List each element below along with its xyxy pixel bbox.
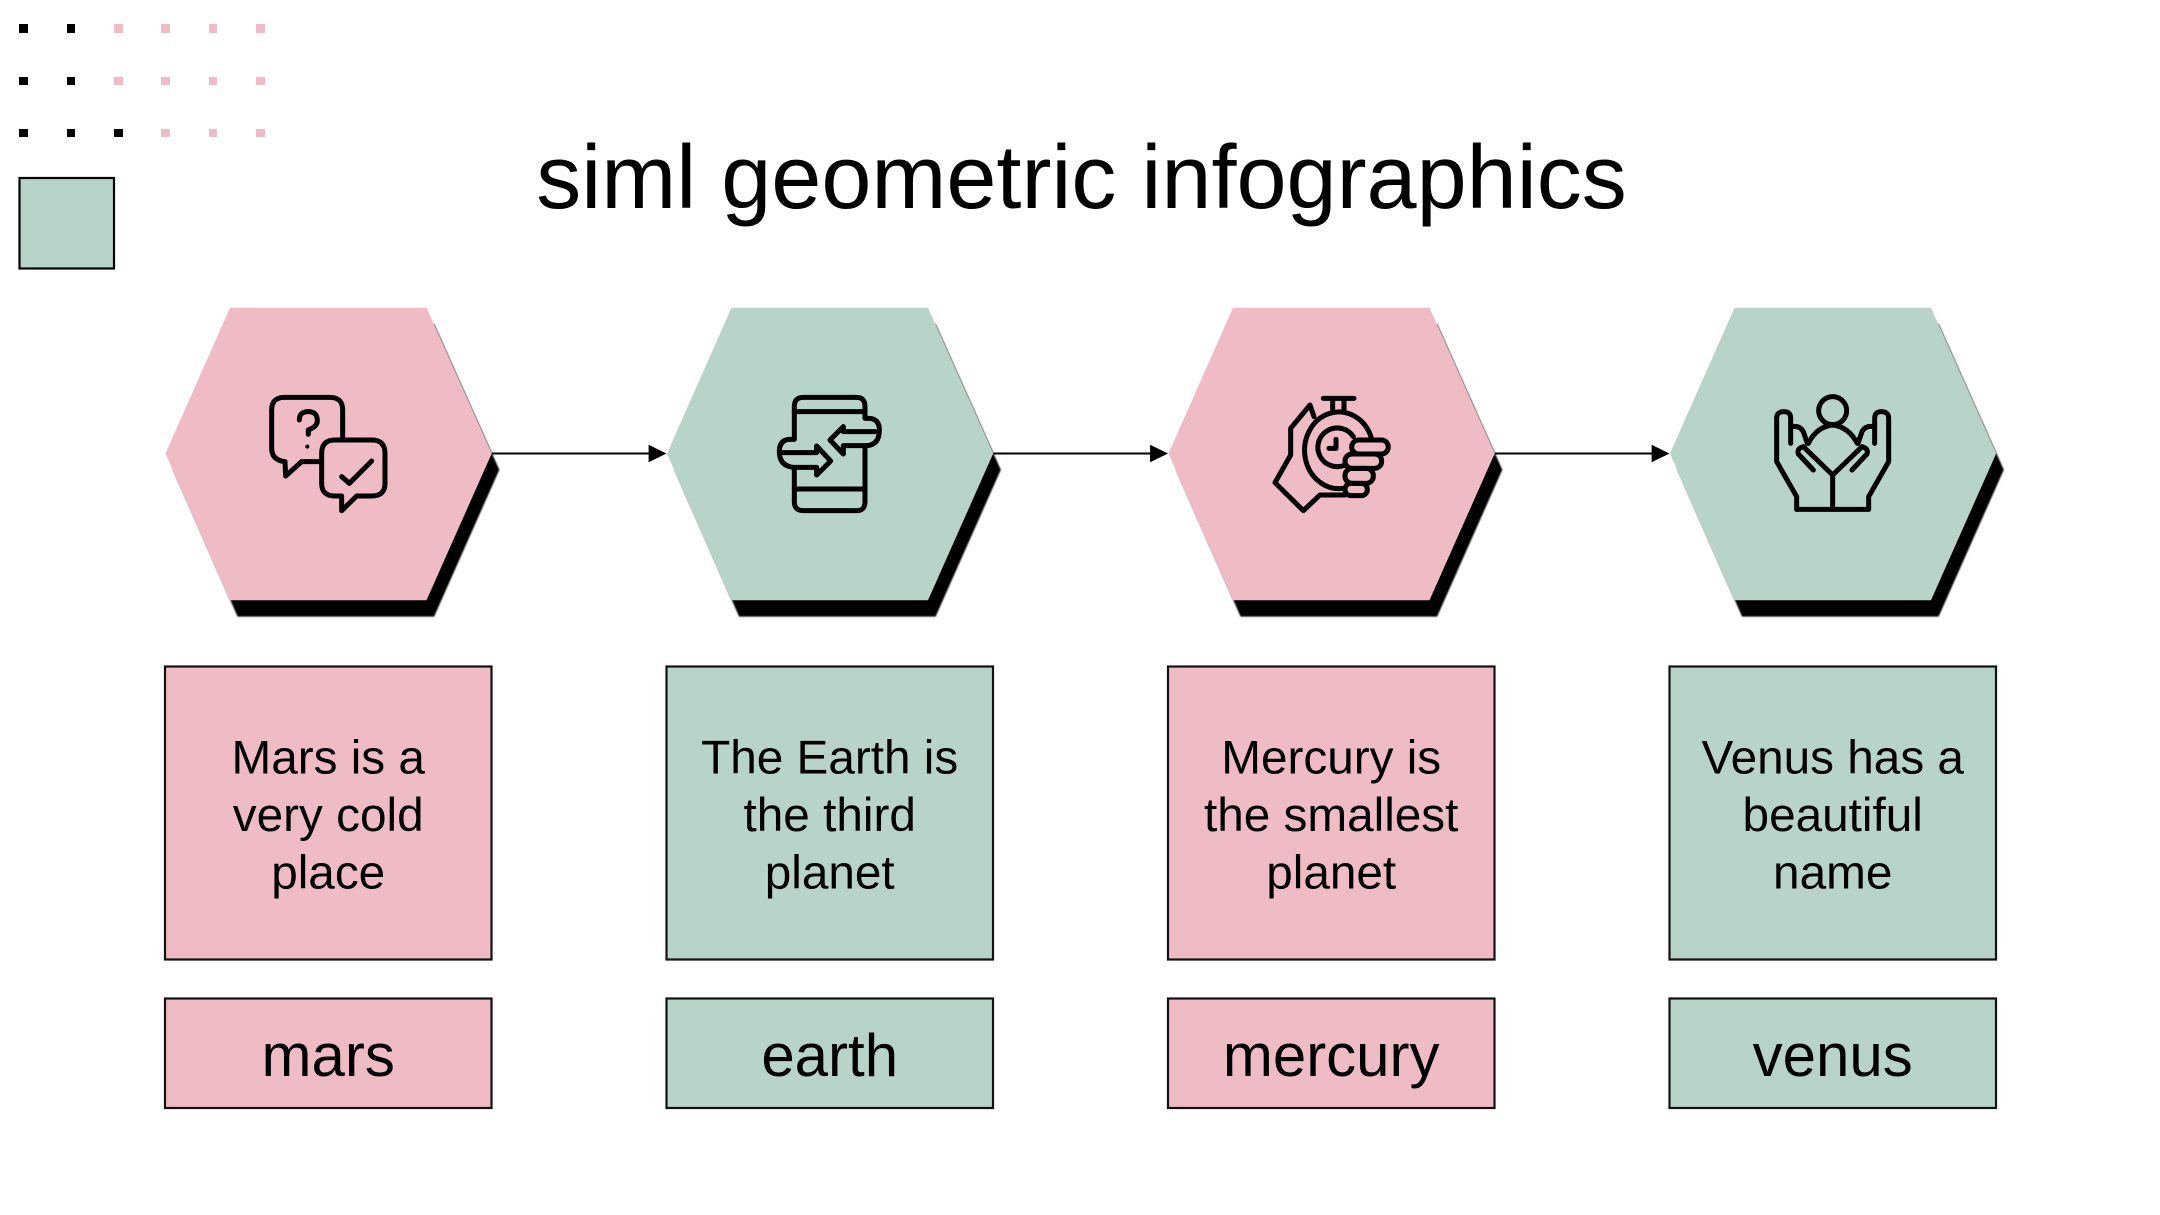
description box: earth	[666, 666, 993, 960]
description box: mars: very cold	[233, 789, 424, 842]
icon: question and answer speech bubbles	[272, 397, 385, 511]
icon: phone with exchange arrows	[779, 397, 879, 511]
label box: venus	[1670, 998, 1996, 1108]
label box: venus: venus	[1753, 1022, 1913, 1089]
description box: mercury: Mercury is	[1221, 732, 1441, 785]
arrow: mars to earth	[492, 445, 666, 462]
description box: earth: planet	[765, 846, 895, 900]
description box: mercury: planet	[1266, 846, 1396, 900]
description box: mercury	[1168, 666, 1494, 960]
description box: mars: Mars is a	[231, 732, 425, 785]
dot grid decoration	[19, 24, 265, 137]
icon: hand holding stopwatch	[1275, 398, 1388, 511]
description box: earth: the third	[744, 789, 916, 842]
hexagon with shadow: earth	[667, 308, 1001, 617]
hexagon with shadow: mercury	[1168, 308, 1502, 617]
hexagon with shadow: venus	[1670, 308, 2004, 617]
label box: mercury	[1168, 998, 1494, 1108]
description box: mars: place	[271, 846, 385, 900]
description box: venus: name	[1773, 846, 1892, 900]
description box: venus	[1670, 666, 1996, 960]
green corner square	[20, 178, 114, 268]
label box: earth	[666, 998, 993, 1108]
description box: venus: beautiful	[1743, 789, 1923, 842]
description box: mercury: the smallest	[1204, 789, 1458, 842]
arrow: earth to mercury	[994, 445, 1168, 462]
column: earth	[666, 308, 1001, 1108]
column: mercury	[1168, 308, 1502, 1108]
hexagon with shadow: mars	[166, 308, 499, 617]
label box: mercury: mercury	[1223, 1022, 1440, 1089]
description box: mars	[165, 666, 492, 960]
column: mars	[165, 308, 499, 1108]
label box: mars: mars	[262, 1022, 395, 1089]
title: siml geometric infographics	[536, 128, 1627, 228]
arrow: mercury to venus	[1495, 445, 1670, 462]
description box: venus: Venus has a	[1701, 732, 1964, 785]
column: venus	[1670, 308, 2004, 1108]
description box: earth: The Earth is	[701, 732, 958, 785]
label box: earth: earth	[761, 1022, 898, 1089]
icon: hands holding a person	[1777, 397, 1889, 509]
label box: mars	[165, 998, 492, 1108]
